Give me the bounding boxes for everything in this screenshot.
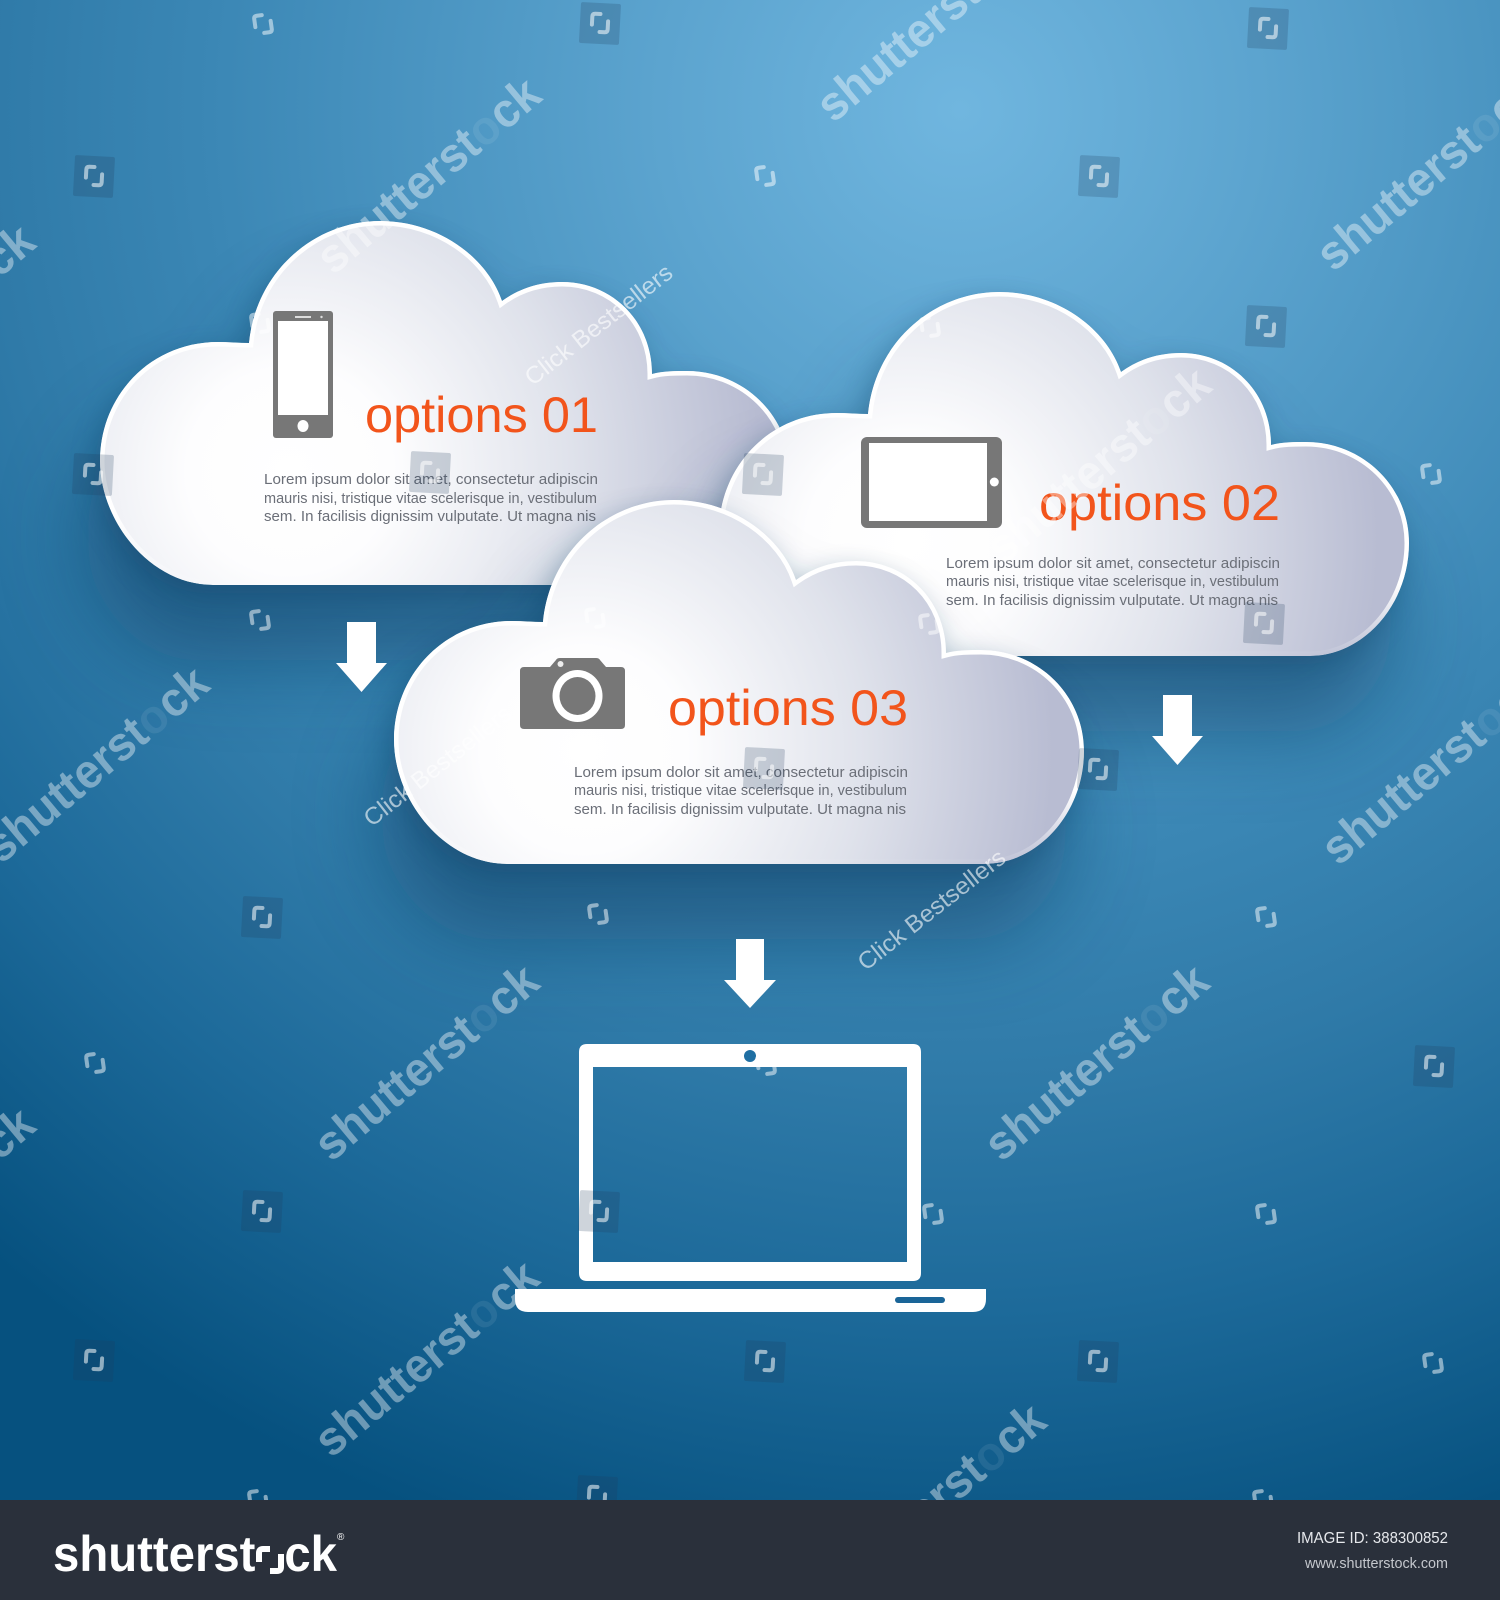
- text block: options 02 body: Lorem ipsum dolor sit amet, consectetur adipiscin: [946, 556, 1280, 572]
- icon: tablet: [861, 437, 1002, 528]
- watermark: click bestsellers: [359, 259, 1011, 976]
- text block: options 01 body: mauris nisi, tristique vitae scelerisque in, vestibulum: [264, 491, 597, 507]
- arrow: from cloud 03 to laptop: [724, 939, 776, 1008]
- watermark: shutterstock wordmarks: shutterstock: [306, 67, 551, 284]
- text block: options 01 body: [264, 472, 598, 525]
- footer url: www.shutterstock.com: [1304, 1555, 1448, 1572]
- text block: options 03 body: mauris nisi, tristique vitae scelerisque in, vestibulum: [574, 783, 907, 799]
- footer logo: shutterstock: [53, 1526, 337, 1582]
- arrow: from cloud 01: [336, 622, 387, 692]
- text block: options 03 body: sem. In facilisis dignissim vulputate. Ut magna nis: [574, 802, 906, 818]
- text block: options 01 body: Lorem ipsum dolor sit amet, consectetur adipiscin: [264, 472, 598, 488]
- text block: options 03 body: Lorem ipsum dolor sit amet, consectetur adipiscin: [574, 765, 908, 781]
- footer bar: [0, 1500, 1500, 1600]
- heading: options 03: options 03: [668, 680, 908, 736]
- watermark: click bestsellers: Click Bestsellers: [853, 844, 1011, 976]
- footer image id: IMAGE ID: 388300852: [1297, 1530, 1448, 1547]
- cloud shape 02: [719, 292, 1409, 656]
- text block: options 02 body: [946, 556, 1280, 609]
- watermark: click bestsellers: Click Bestsellers: [520, 259, 678, 391]
- icon: camera: [520, 658, 625, 729]
- icon: smartphone: [273, 311, 333, 438]
- heading: options 02: options 02: [1039, 475, 1280, 531]
- footer logo: ®: [337, 1532, 345, 1543]
- watermark: shutterstock wordmarks: shutterstock: [304, 1250, 549, 1467]
- watermark: click bestsellers: Click Bestsellers: [359, 700, 517, 832]
- panel: options 02 cloud: [719, 292, 1409, 656]
- arrow: from cloud 02: [1152, 695, 1203, 765]
- panel: options 03 cloud: [394, 500, 1084, 864]
- icon: laptop: [515, 1044, 986, 1312]
- watermark: shutterstock wordmarks: shutterstock: [974, 954, 1219, 1171]
- text block: options 03 body: [574, 765, 908, 818]
- text block: options 02 body: mauris nisi, tristique vitae scelerisque in, vestibulum: [946, 574, 1279, 590]
- cloud shape 03: [394, 500, 1084, 864]
- watermark: shutterstock wordmarks: shutterstock: [976, 357, 1221, 574]
- panel: options 01 cloud: [100, 221, 790, 585]
- text block: options 01 body: sem. In facilisis dignissim vulputate. Ut magna nis: [264, 509, 596, 525]
- watermark: shutterstock wordmarks: shutterstock: [304, 954, 549, 1171]
- heading: options 01: options 01: [365, 387, 598, 443]
- cloud shape 01: [100, 221, 790, 585]
- text block: options 02 body: sem. In facilisis dignissim vulputate. Ut magna nis: [946, 593, 1278, 609]
